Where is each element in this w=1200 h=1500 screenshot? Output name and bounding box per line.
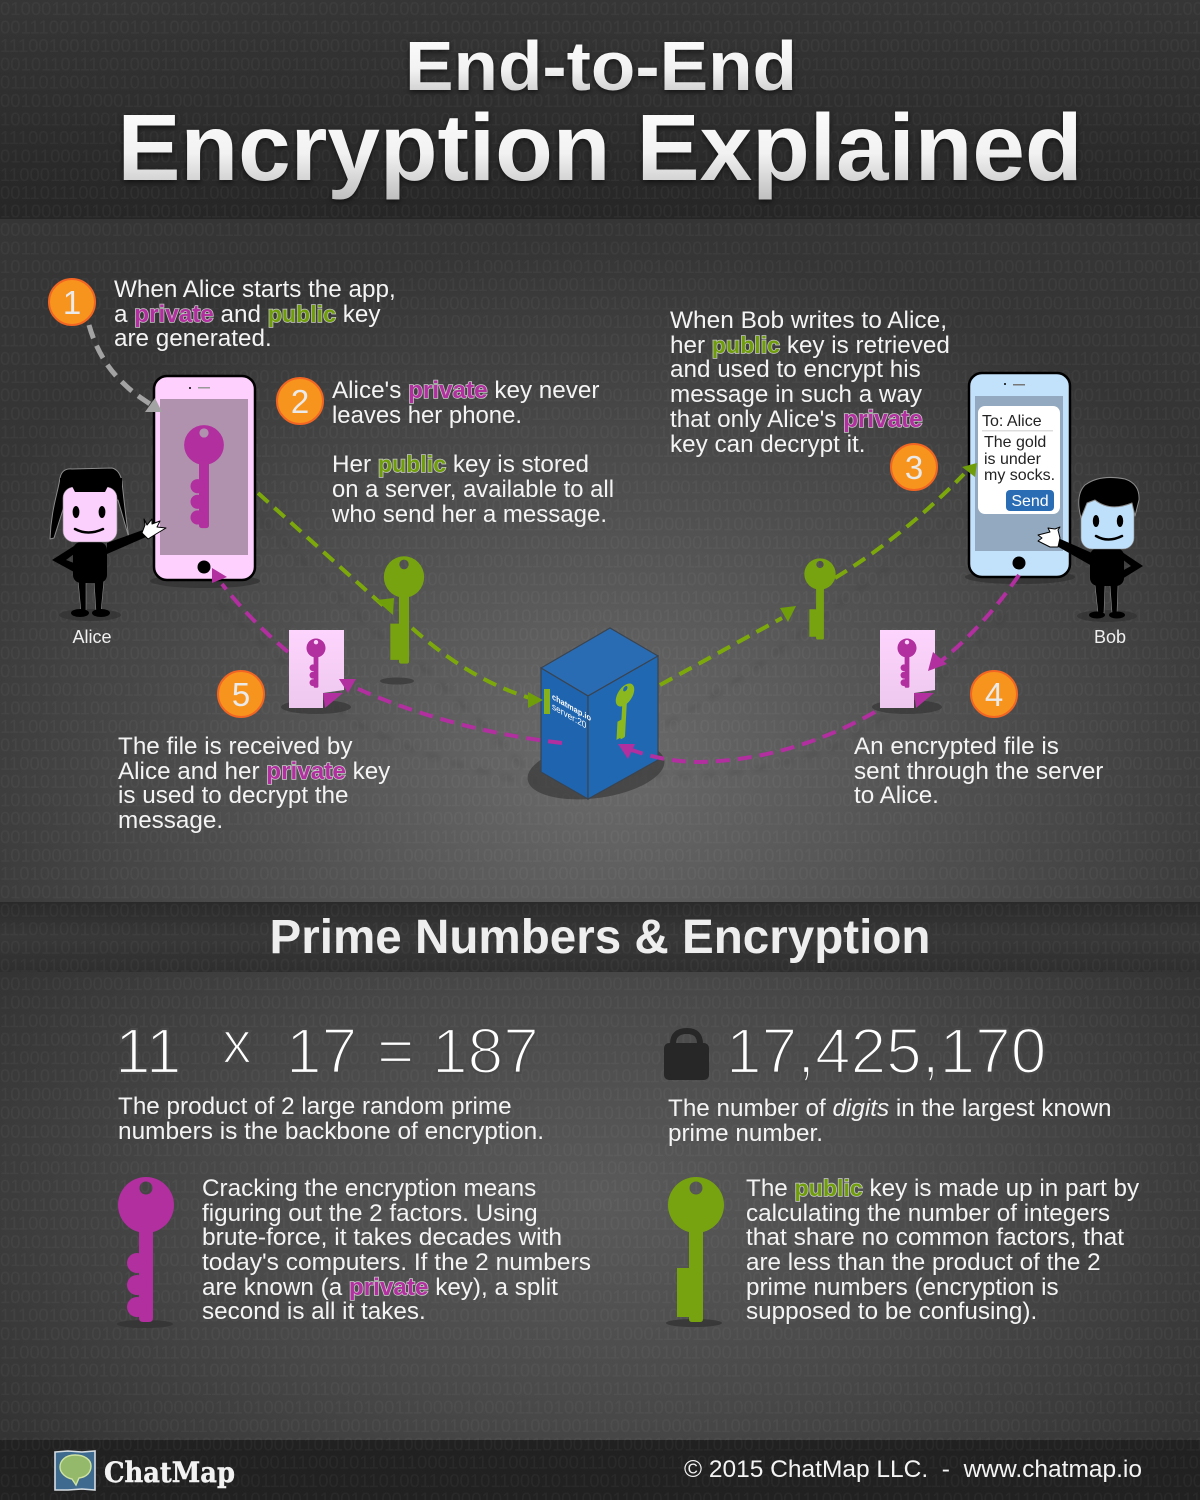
badge 2: [277, 378, 323, 424]
cracking text: figuring out the 2 factors. Using: [202, 1200, 538, 1227]
title: End-to-End: [405, 27, 797, 105]
shadow: middle green key: [380, 678, 414, 684]
step 5 text: is used to decrypt the: [118, 782, 349, 809]
step 4 text: to Alice.: [854, 782, 939, 809]
message card: is under: [984, 451, 1042, 468]
digit count caption: The number of digits in the largest known: [668, 1095, 1112, 1122]
logo: ChatMap: [55, 1451, 235, 1490]
step 5 text: Alice and her private key: [118, 758, 391, 785]
step 1 text: are generated.: [114, 325, 272, 352]
background: header band: [0, 0, 1200, 219]
badge 1: [49, 279, 95, 325]
file icon: Alice: [289, 630, 344, 708]
message card: To: Alice: [982, 413, 1042, 430]
step 3 text: message in such a way: [670, 381, 923, 408]
step 5 text: [118, 733, 391, 834]
icon: green key left: [384, 556, 424, 664]
digit count: 17,425,170: [726, 1015, 1046, 1087]
label: Bob: Bob: [1094, 627, 1126, 647]
badge 5: [218, 671, 264, 717]
step 3 text: her public key is retrieved: [670, 332, 950, 359]
character: Alice: [50, 468, 166, 617]
icon: magenta key on phone: [184, 425, 224, 528]
icon: large green key: [668, 1177, 724, 1322]
icon: Bob hand: [1038, 527, 1060, 547]
step 2 text: leaves her phone.: [332, 402, 522, 429]
arrow: green server to Bob: [660, 463, 977, 685]
equation: =: [377, 1015, 414, 1087]
equation: 11: [115, 1015, 181, 1087]
step 5 text: The file is received by: [118, 733, 353, 760]
arrow: step 1 gray dashed: [89, 325, 162, 412]
step 2 text: who send her a message.: [331, 501, 607, 528]
digit count caption: prime number.: [668, 1120, 823, 1147]
icon: large magenta key: [118, 1177, 174, 1322]
title: [118, 27, 1082, 201]
phone: Bob: [969, 373, 1070, 577]
step 1 text: When Alice starts the app,: [114, 276, 396, 303]
equation caption: The product of 2 large random prime: [118, 1093, 512, 1120]
message card: my socks.: [984, 467, 1055, 484]
badge 5: 5: [232, 676, 250, 713]
faint arrow shadows: [215, 510, 1010, 790]
public key text: that share no common factors, that: [746, 1224, 1124, 1251]
step 4 text: An encrypted file is: [854, 733, 1059, 760]
icon: map with speech bubble: [55, 1451, 95, 1490]
badge 4: 4: [985, 676, 1003, 713]
character: Bob: [1038, 477, 1143, 618]
shadow: large magenta key: [117, 1320, 173, 1328]
cracking text: second is all it takes.: [202, 1298, 426, 1325]
icon: green key right: [804, 558, 836, 640]
public key text: [746, 1175, 1140, 1325]
server label: server:20: [552, 701, 586, 732]
badge 2: 2: [291, 383, 309, 420]
icon: Alice hand: [142, 519, 166, 539]
public key text: are less than the product of the 2: [746, 1249, 1101, 1276]
equation: 187: [432, 1015, 539, 1087]
step 2 text: Her public key is stored: [332, 451, 589, 478]
digit count caption: [668, 1095, 1112, 1147]
step 3 text: that only Alice's private: [670, 406, 923, 433]
step 1 text: a private and public key: [114, 301, 381, 328]
step 1 text: [114, 276, 396, 352]
phone: Alice: [154, 376, 255, 580]
server box: [541, 628, 658, 799]
step 3 text: When Bob writes to Alice,: [670, 307, 947, 334]
background: section heading band: [0, 902, 1200, 972]
badge 4: [971, 671, 1017, 717]
badge 3: [891, 444, 937, 490]
heading: prime numbers: Prime Numbers & Encryption: [270, 911, 930, 964]
send button: Send: [1011, 493, 1049, 510]
step 2 text: on a server, available to all: [332, 476, 614, 503]
file icon: Bob: [880, 630, 935, 708]
public key text: supposed to be confusing).: [746, 1298, 1037, 1325]
background: prime section: [0, 972, 1200, 1440]
equation caption: [118, 1093, 544, 1145]
logo: ChatMap: ChatMap: [104, 1456, 235, 1489]
background: explanation section: [0, 219, 1200, 903]
shadow: Alice file: [281, 700, 351, 714]
public key text: calculating the number of integers: [746, 1200, 1110, 1227]
icon: padlock: [664, 1031, 709, 1080]
cracking text: brute-force, it takes decades with: [202, 1224, 562, 1251]
step 4 text: [854, 733, 1103, 809]
step 4 text: sent through the server: [854, 758, 1103, 785]
cracking text: today's computers. If the 2 numbers: [202, 1249, 591, 1276]
message card: The gold: [984, 434, 1046, 451]
step 3 text: and used to encrypt his: [670, 356, 921, 383]
arrow: green key to server: [258, 493, 543, 708]
equation caption: numbers is the backbone of encryption.: [118, 1118, 544, 1145]
arrowhead: into Alice file: [339, 679, 356, 693]
public key text: The public key is made up in part by: [746, 1175, 1140, 1202]
cracking text: [202, 1175, 591, 1325]
equation: x: [222, 1009, 252, 1076]
arrow: magenta Bob to server: [618, 575, 1019, 762]
step 3 text: key can decrypt it.: [670, 431, 865, 458]
badge 1: 1: [63, 284, 81, 321]
cracking text: Cracking the encryption means: [202, 1175, 536, 1202]
server label: chatmap.io: [552, 691, 591, 723]
title: Encryption Explained: [118, 95, 1082, 201]
cracking text: are known (a private key), a split: [202, 1274, 558, 1301]
shadow: server: [524, 733, 668, 807]
arrowhead: into Bob file: [928, 652, 947, 671]
step 2 text: Alice's private key never: [332, 377, 599, 404]
step 3 text: [670, 307, 950, 458]
label: Alice: Alice: [72, 627, 112, 647]
copyright: © 2015 ChatMap LLC. - www.chatmap.io: [684, 1456, 1142, 1483]
shadow: Bob figure: [1077, 610, 1137, 622]
public key text: prime numbers (encryption is: [746, 1274, 1059, 1301]
step 2 text: [331, 377, 614, 528]
background: footer band: [0, 1440, 1200, 1500]
shadow: Bob phone: [965, 570, 1075, 584]
shadow: Alice figure: [59, 609, 121, 621]
shadow: Alice phone: [150, 574, 260, 588]
shadow: large green key: [666, 1319, 722, 1327]
server label: [544, 689, 591, 732]
message card: [978, 406, 1060, 514]
arrow: magenta server to Alice: [212, 568, 562, 743]
equation: 17: [286, 1015, 357, 1087]
step 5 text: message.: [118, 807, 223, 834]
icon: green key on server: [613, 680, 635, 743]
shadow: Bob file: [872, 700, 942, 714]
badge 3: 3: [905, 449, 923, 486]
equation: [115, 1009, 539, 1087]
